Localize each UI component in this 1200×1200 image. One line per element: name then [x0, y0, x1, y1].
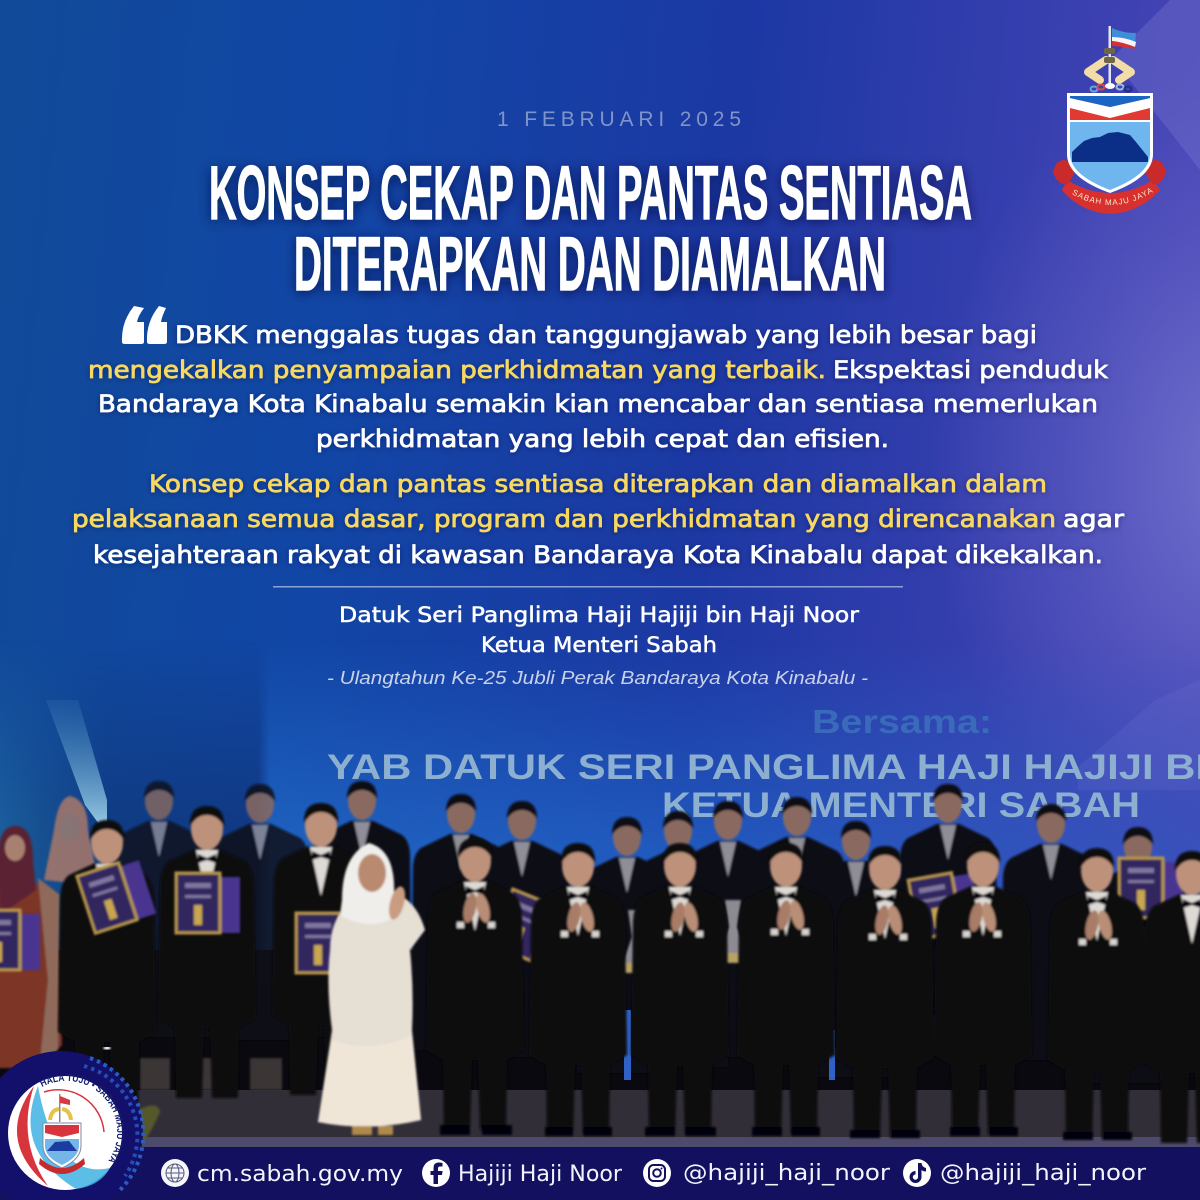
dark crowd mass and stage: [0, 950, 1200, 1090]
screen text: [327, 703, 1200, 825]
back row people: [109, 781, 1188, 1083]
veiled woman in back row: [44, 796, 96, 885]
diagonal facet on screen: [1078, 680, 1200, 790]
quote paragraph 2: Konsep cekap dan pantas sentiasa diterapkan dan diamalkan dalam: [149, 470, 1047, 498]
decorative light facet top right: [1112, 0, 1200, 170]
badge: Hala Tuju Sabah Maju Jaya: [0, 1051, 146, 1200]
event caption: - Ulangtahun Ke-25 Jubli Perak Bandaraya Kota Kinabalu -: [327, 668, 868, 688]
spotlight beam: [46, 700, 107, 835]
quote paragraph 1: Ekspektasi penduduk: [833, 356, 1108, 384]
motto ribbon: [1062, 180, 1160, 214]
woman in white dress: [318, 843, 425, 1135]
attribution name and role: [339, 603, 859, 657]
instagram link: [643, 1159, 891, 1187]
stage lights: [100, 1047, 314, 1050]
quote paragraph 1: Bandaraya Kota Kinabalu semakin kian mencabar dan sentiasa memerlukan: [98, 390, 1098, 418]
screen text: Bersama:: [812, 703, 992, 740]
front row people applauding: [426, 838, 1200, 1143]
attribution name and role: Ketua Menteri Sabah: [481, 633, 717, 657]
badge ring text: HALA TUJU • SABAH MAJU JAYA: [40, 1074, 124, 1162]
quote paragraph 2: agar: [1063, 505, 1124, 533]
middle row people: [58, 803, 370, 1112]
quote paragraph 2: pelaksanaan semua dasar, program dan perkhidmatan yang direncanakan: [72, 505, 1056, 533]
date: 1 FEBRUARI 2025: [497, 108, 744, 131]
arms: [1088, 60, 1131, 80]
footer band: [0, 1147, 1200, 1200]
crest: Sabah coat of arms: [1053, 26, 1166, 214]
quote paragraph 1: mengekalkan penyampaian perkhidmatan yang terbaik.: [88, 356, 826, 384]
photo: award ceremony stage: [0, 640, 1200, 1147]
shoes: [440, 1125, 1132, 1140]
quote paragraph 1: [88, 321, 1108, 453]
quote paragraph 1: perkhidmatan yang lebih cepat dan efisien.: [316, 425, 889, 453]
shield: [1067, 93, 1153, 193]
stage screen: [0, 682, 1200, 950]
plant by the stage: [130, 1105, 160, 1146]
title: [209, 151, 972, 307]
tiktok link: @hajiji_haji_noor: [940, 1161, 1147, 1186]
attribution name and role: Datuk Seri Panglima Haji Hajiji bin Haji Noor: [339, 603, 859, 627]
right side glow: [930, 50, 1200, 890]
motto text: SABAH MAJU JAYA: [1072, 188, 1153, 206]
plaques and trophies: [0, 856, 1183, 973]
wreath: [1090, 84, 1132, 92]
instagram link: @hajiji_haji_noor: [683, 1161, 891, 1186]
website link: cm.sabah.gov.my: [197, 1162, 403, 1187]
screen text: YAB DATUK SERI PANGLIMA HAJI HAJIJI BI: [327, 748, 1200, 787]
facebook link: Hajiji Haji Noor: [458, 1162, 623, 1187]
quote paragraph 2: kesejahteraan rakyat di kawasan Bandaraya Kota Kinabalu dapat dikekalkan.: [93, 541, 1103, 569]
icon: quotation mark: [122, 306, 167, 344]
blue gaps behind the crowd: [624, 960, 1180, 1080]
quote paragraph 1: DBKK menggalas tugas dan tanggungjawab yang lebih besar bagi: [175, 321, 1037, 349]
screen text: KETUA MENTERI SABAH: [662, 786, 1140, 825]
badge crest: [39, 1094, 85, 1174]
tiktok link: [903, 1159, 1147, 1187]
woman in red dress: [0, 826, 62, 1068]
flag and pole: [1108, 26, 1111, 88]
quote paragraph 2: [72, 470, 1124, 569]
